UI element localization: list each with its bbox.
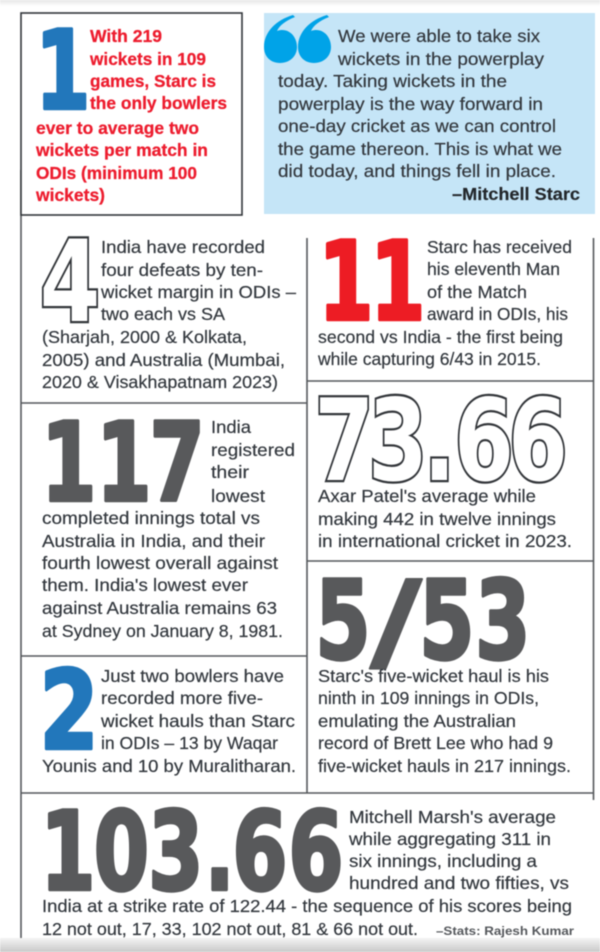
text block: them. India's lowest ever (42, 575, 248, 595)
text block (317, 237, 572, 369)
big number 2: 2 (39, 648, 99, 775)
red text block: wickets in 109 (89, 49, 206, 69)
panel: 4 defeats (40, 215, 296, 392)
panel: 2 five-wicket hauls (39, 648, 296, 776)
text block: ninth in 109 innings in ODIs, (318, 688, 539, 708)
text block: of the Match (427, 282, 527, 302)
text block: Just two bowlers have (101, 666, 284, 686)
text block: making 442 in twelve innings (318, 509, 556, 529)
text block: wicket hauls than Starc (100, 711, 295, 731)
panel: 1 wicket record (21, 7, 242, 215)
panel: 5/53 five-wicket haul (315, 557, 571, 776)
red text block: ever to average two (36, 118, 199, 138)
big number 5/53: 53 (419, 557, 530, 685)
text block: six innings, including a (349, 851, 537, 871)
text block: while capturing 6/43 in 2015. (317, 349, 541, 369)
text block: in international cricket in 2023. (318, 531, 572, 551)
text block: Starc has received (427, 237, 572, 257)
big number 5/53 (315, 557, 530, 685)
quote text: We were able to take six (338, 26, 540, 46)
quote text: the game thereon. This is what we (278, 139, 562, 159)
text block: second vs India - the first being (318, 327, 563, 347)
text block: India at a strike rate of 122.44 - the sequence of his scores being (42, 896, 572, 916)
text block: fourth lowest overall against (42, 553, 278, 573)
text block: hundred and two fifties, vs (349, 873, 569, 893)
text block: at Sydney on January 8, 1981. (42, 621, 283, 641)
text block: (Sharjah, 2000 & Kolkata, (42, 327, 247, 347)
quote text: –Mitchell Starc (452, 184, 580, 204)
red text block: wickets per match in (35, 140, 208, 160)
quote text: today. Taking wickets in the (278, 71, 507, 91)
red text block: ODIs (minimum 100 (36, 163, 197, 183)
text block: lowest (211, 486, 265, 506)
red text block: With 219 (90, 26, 162, 46)
big number 5/53: 5 (315, 557, 371, 685)
text block: five-wicket hauls in 217 innings. (318, 756, 571, 776)
red text block: wickets) (35, 185, 105, 205)
text block: their (211, 462, 249, 482)
text block: registered (211, 440, 295, 460)
big number 117: 117 (41, 399, 205, 527)
big number 5/53: / (370, 558, 423, 684)
text block: Axar Patel's average while (318, 486, 536, 506)
icon: quotation marks (264, 15, 331, 63)
text block: India (211, 417, 251, 437)
text block: two each vs SA (101, 304, 225, 324)
text block: recorded more five- (101, 688, 263, 708)
big number 1: 1 (35, 7, 91, 135)
big number 103.66: 103.66 (40, 788, 344, 916)
text block: 2005) and Australia (Mumbai, (42, 350, 285, 370)
quote text: did today, and things fell in place. (278, 161, 556, 181)
panel: 117 lowest total (41, 399, 295, 641)
quote text: powerplay is the way forward in (278, 94, 543, 114)
text block (42, 666, 296, 776)
text block: India have recorded (101, 237, 265, 257)
text block (42, 417, 295, 641)
text block: emulating the Australian (318, 711, 516, 731)
text block: Younis and 10 by Muralitharan. (42, 756, 296, 776)
text block: in ODIs – 13 by Waqar (101, 733, 278, 753)
text block: record of Brett Lee who had 9 (318, 733, 553, 753)
text block: while aggregating 311 in (348, 829, 551, 849)
text block: 12 not out, 17, 33, 102 not out, 81 & 66 not out. (42, 919, 418, 939)
red text block: games, Starc is (90, 71, 216, 91)
big number 73.66 outline: 73.66 (314, 375, 568, 507)
panel: 73.66 Axar Patel (314, 375, 572, 551)
red text block (35, 26, 227, 205)
text block (318, 666, 571, 776)
panel: 11 man of the match (317, 218, 572, 369)
big number 4 outline: 4 (40, 215, 100, 348)
panel: Mitchell Starc quote (264, 13, 595, 214)
quote text: one-day cricket as we can control (278, 116, 556, 136)
text block: Starc's five-wicket haul is his (318, 666, 549, 686)
credit: –Stats: Rajesh Kumar (436, 926, 575, 938)
text block: Australia in India, and their (42, 531, 265, 551)
text block: against Australia remains 63 (42, 598, 277, 618)
text block: four defeats by ten- (101, 260, 263, 280)
text block: wicket margin in ODIs – (100, 282, 296, 302)
text block: his eleventh Man (427, 259, 560, 279)
big number 11: 11 (318, 218, 426, 346)
panel: 103.66 Mitchell Marsh (40, 788, 575, 939)
red text block: the only bowlers (90, 93, 227, 113)
quote text: wickets in the powerplay (337, 49, 544, 69)
text block (42, 807, 572, 939)
text block: award in ODIs, his (427, 304, 568, 324)
text block: Mitchell Marsh's average (349, 807, 556, 827)
text block: completed innings total vs (42, 508, 260, 528)
text block (318, 486, 572, 551)
text block: 2020 & Visakhapatnam 2023) (42, 372, 278, 392)
quote text (278, 26, 580, 204)
text block (42, 237, 296, 392)
